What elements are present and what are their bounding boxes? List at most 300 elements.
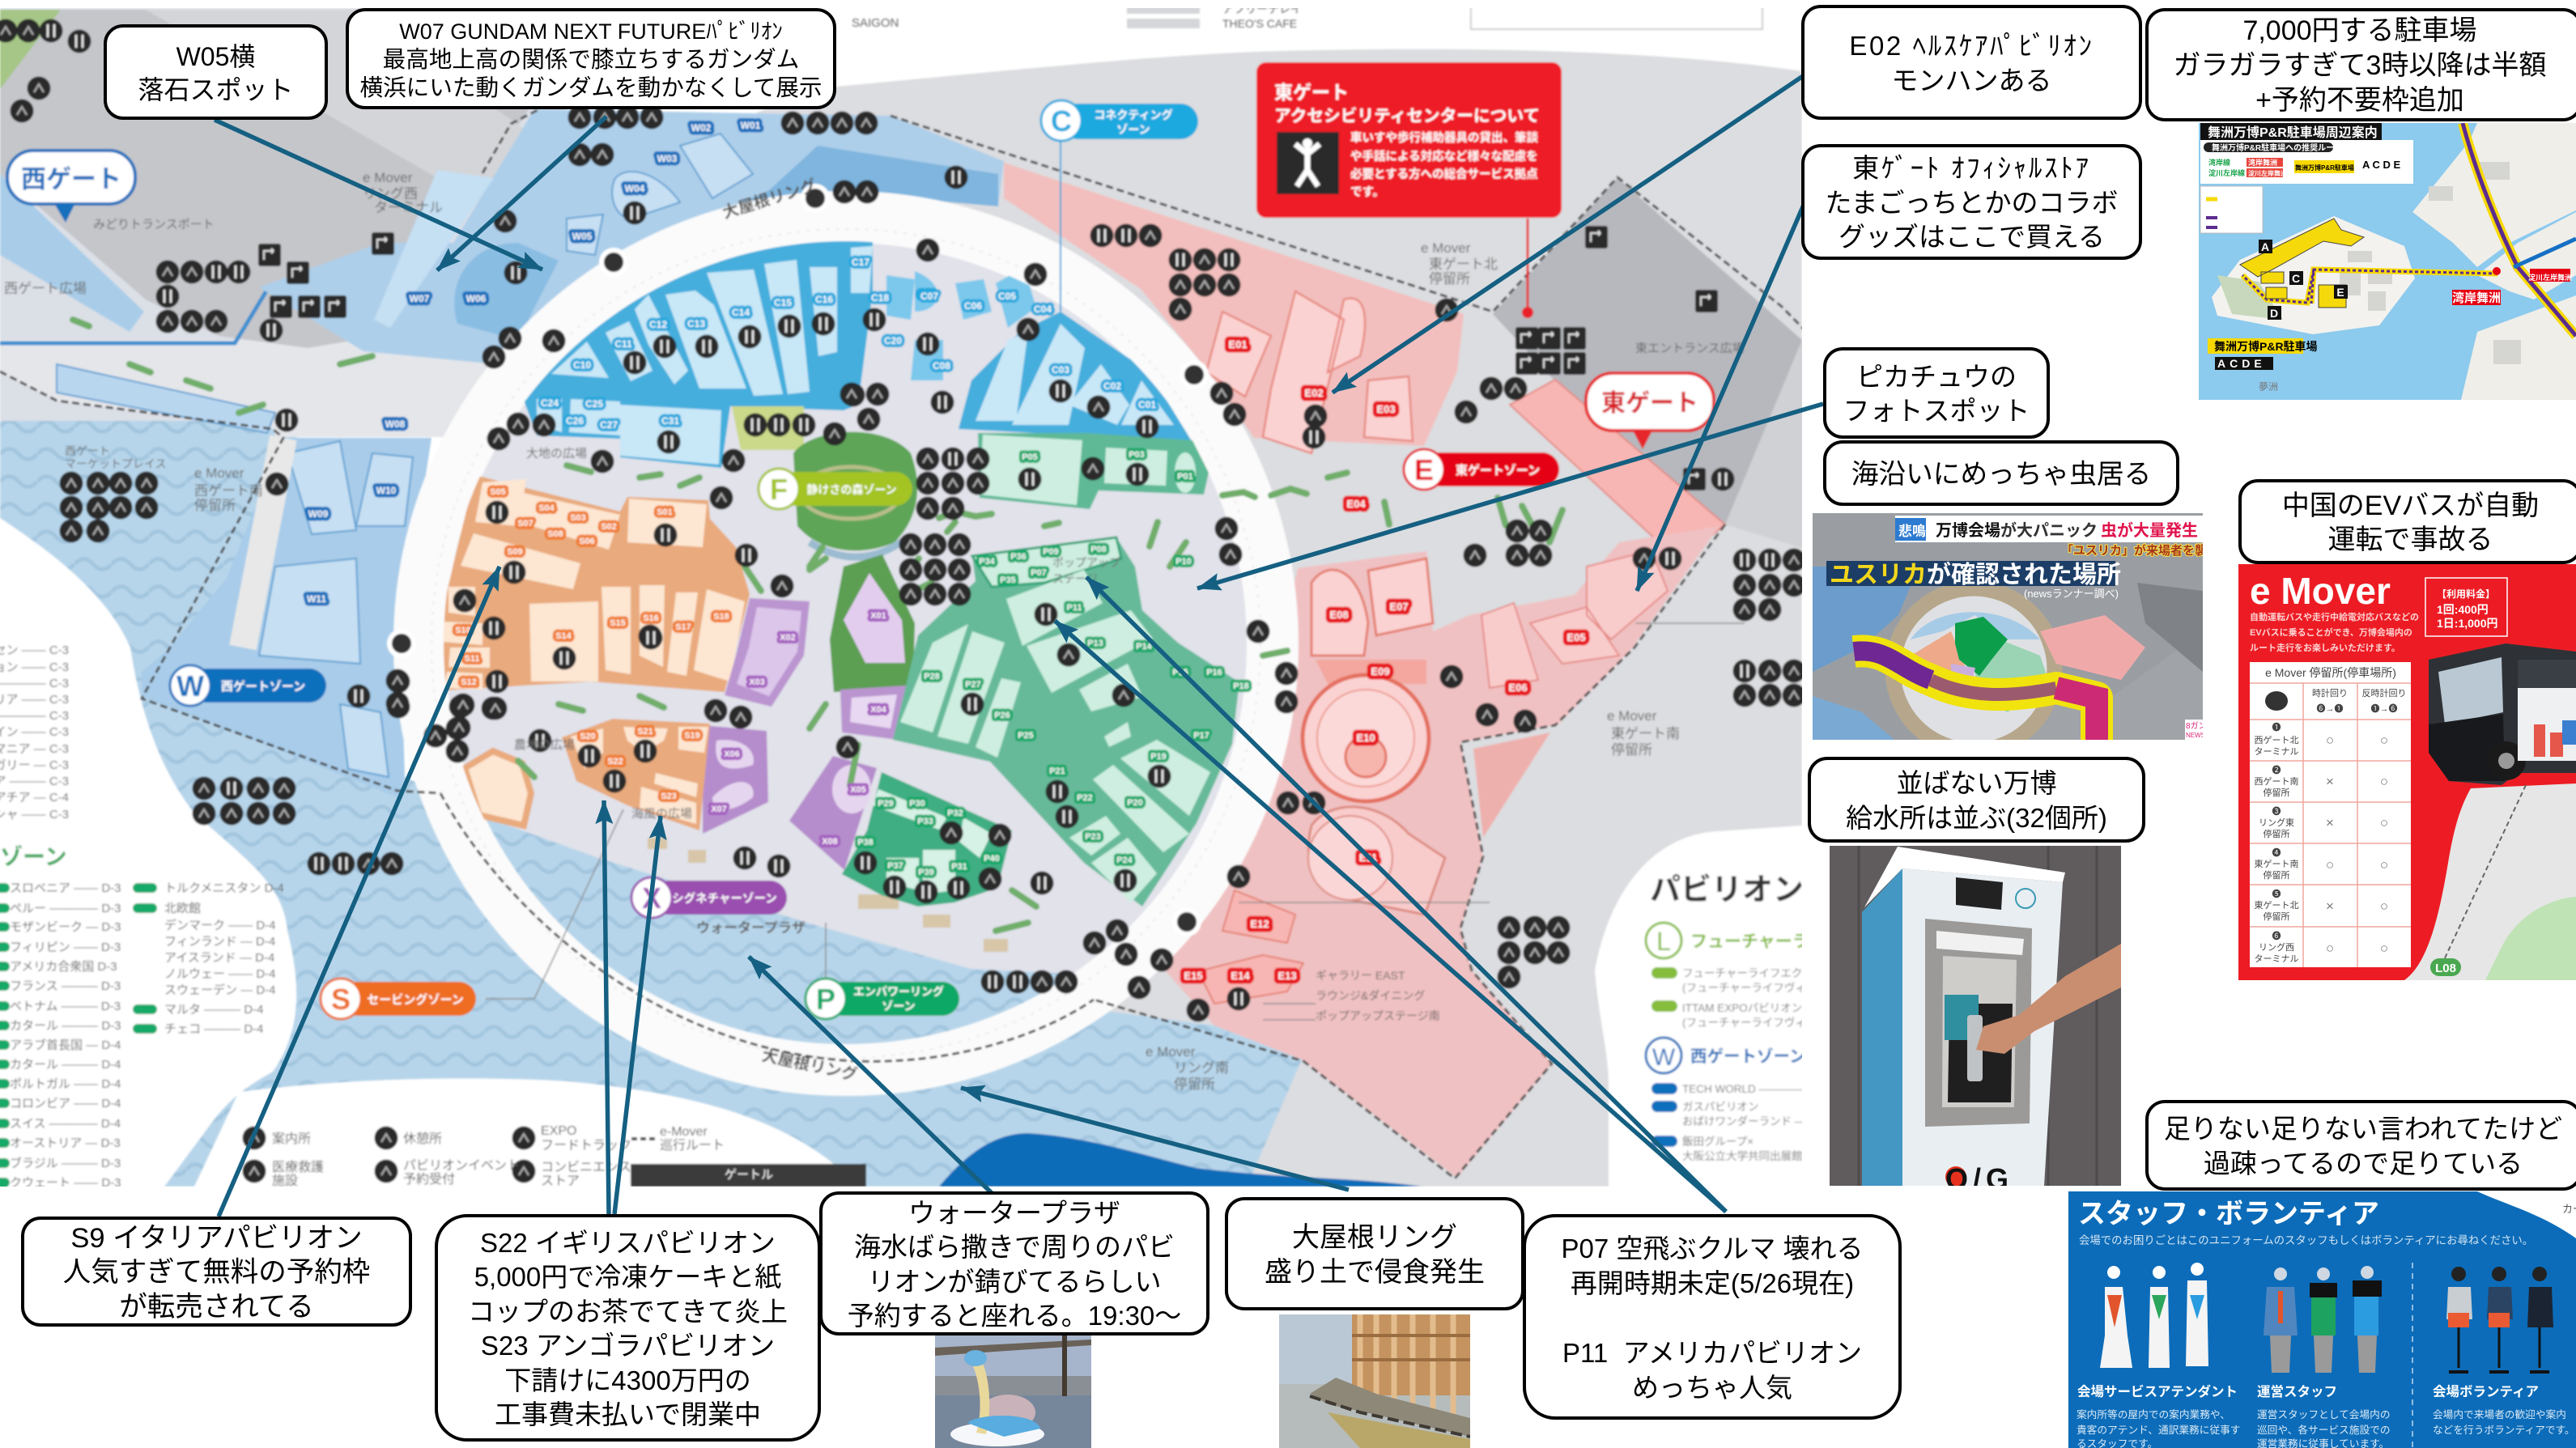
pavilion labels S: S20: [580, 732, 596, 741]
map background: outer ground: [757, 49, 1802, 1187]
image: P&R parking map: 夢洲: [2259, 381, 2278, 393]
pavilion labels C: C26: [566, 415, 584, 427]
dispenser screen: [1956, 877, 2003, 910]
pavilion labels C: C11: [614, 338, 632, 350]
callout: water stations: 並ばない万博: [1896, 768, 2056, 798]
zone W badge: W: [176, 669, 204, 703]
map small place names: 大地の広場: [526, 447, 587, 461]
callout: W05 rockfall: 落石スポット: [138, 74, 293, 104]
callout: S9 Italy: S9 イタリアパビリオン: [70, 1223, 363, 1254]
image: e Mover guide: 1回:400円: [2437, 603, 2489, 616]
zone P main: [893, 537, 1239, 907]
pavilion labels P: P23: [1085, 832, 1101, 842]
arrow: W05 rockfall: [215, 120, 542, 270]
pavilion labels W: W09: [308, 508, 329, 520]
pavilion labels W: W07: [410, 293, 430, 304]
callout: water plaza: ウォータープラザ: [908, 1198, 1120, 1227]
callout: water plaza: [819, 1191, 1209, 1335]
pavilion labels C: C12: [649, 319, 667, 330]
map small place names: アフリーデレイ: [1222, 2, 1302, 15]
pavilion labels X: X03: [749, 677, 765, 687]
zone list legend left: ペルー ———— D-3: [10, 902, 121, 915]
image: P&R parking map: [2199, 123, 2576, 400]
staff panel: role headings: 運営スタッフ: [2257, 1384, 2337, 1399]
west parking area: [0, 10, 529, 348]
parking map: lot letters: A: [2261, 240, 2269, 253]
pavilion labels E: E10: [1356, 732, 1375, 744]
arrow: W07 Gundam: [437, 117, 606, 270]
e Mover: stop table: ×: [2326, 898, 2334, 914]
pavilion labels E: E01: [1228, 338, 1248, 350]
callout: S22 UK and S23 Angola: S23 アンゴラパビリオン: [481, 1331, 775, 1361]
e Mover: stop table: ○: [2380, 774, 2388, 789]
embankment: [1310, 1378, 1470, 1437]
callout: ring erosion: 盛り土で侵食発生: [1265, 1256, 1485, 1287]
pavilion labels P: P25: [1018, 731, 1034, 741]
image: P&R parking map: 舞洲万博P&R駐車場への推奨ルート: [2212, 142, 2342, 153]
pavilion labels P: P09: [1043, 547, 1059, 557]
pavilion labels S: S18: [713, 612, 729, 622]
pavilion labels P: P36: [1010, 552, 1027, 562]
zone list legend left: モザンビーク — D-3: [10, 920, 121, 934]
zone F badge: F: [770, 473, 788, 506]
pavilion list legend right: パビリオン: [1650, 873, 1804, 907]
callout: P07 flying car and P11 USA: めっちゃ人気: [1632, 1373, 1792, 1403]
pavilion labels P: P17: [1193, 731, 1209, 741]
arrow: P07 flying car: [1086, 577, 1726, 1212]
zone list legend left: アメリカ合衆国 D-3: [10, 960, 117, 974]
zone S pavilions: [443, 479, 745, 690]
zone S north: [441, 475, 750, 692]
callout: bugs along the sea: 海沿いにめっちゃ虫居る: [1851, 459, 2151, 490]
pavilion labels E: E02: [1304, 387, 1324, 399]
e Mover: L08 tag: [2430, 958, 2461, 976]
callout: W07 Gundam: 最高地上高の関係で膝立ちするガンダム: [383, 47, 799, 73]
OSG logo: O/G: [1945, 1162, 2009, 1195]
pavilion labels P: P32: [947, 809, 963, 818]
pavilion labels P: P37: [887, 861, 903, 871]
pavilion list legend right: 大阪公立大学共同出展館 —: [1682, 1150, 1817, 1162]
staff panel: role descriptions: 巡回や、各サービス施設での: [2257, 1424, 2391, 1436]
zone list legend left: スウェーデン — D-4: [164, 983, 276, 997]
map small place names: みどりトランスポート: [93, 218, 215, 231]
pavilion labels C: C15: [774, 297, 792, 308]
pavilion labels C: C16: [815, 294, 833, 305]
parking map: bottom tag: [2208, 338, 2303, 354]
zone list legend left: マルタ ——— D-4: [164, 1003, 264, 1017]
pavilion labels S: S10: [455, 626, 471, 635]
zone list legend left: ノルウェー —— D-4: [164, 967, 276, 981]
pavilion labels P: P21: [1049, 766, 1065, 776]
pavilion labels C: C14: [732, 307, 750, 318]
operations staff figures: [2264, 1266, 2382, 1373]
map small place names: 停留所: [194, 498, 236, 513]
forest with lavender: [830, 554, 915, 692]
map small place names: e Mover: [363, 170, 413, 185]
red accessibility leader: [1527, 219, 1528, 318]
inner water: [444, 241, 1248, 1046]
map small place names: リング西: [363, 186, 418, 202]
pavilion list legend right: W: [1652, 1044, 1676, 1071]
zone P badge: ゾーン: [882, 1000, 916, 1013]
map small place names: 農地の広場: [514, 738, 575, 752]
image: midge location news screenshot: NEWS: [2186, 732, 2205, 739]
pavilion labels S: S23: [661, 792, 677, 801]
callout: S9 Italy: 人気すぎて無料の予約枠: [63, 1257, 370, 1288]
zone C badge: コネクティング: [1094, 108, 1173, 121]
pavilion labels C: C02: [1103, 380, 1121, 392]
callout: E02 health pavilion: モンハンある: [1891, 65, 2051, 96]
map small place names: 西ゲート南: [194, 483, 263, 499]
pavilion labels C: C18: [871, 292, 889, 304]
pavilion labels W: W08: [385, 418, 406, 430]
parking map: exit labels: 湾岸舞洲: [2452, 291, 2501, 305]
arrow: ring erosion: [961, 1088, 1349, 1190]
bottle: [1967, 1015, 1983, 1081]
map small place names: 大屋根リング: [760, 1045, 859, 1085]
image: midge location news screenshot: 虫が大量発生: [2101, 520, 2198, 540]
zone P badge: P: [816, 983, 835, 1016]
pavilion list legend right: [1595, 826, 1843, 1187]
pavilion labels C: C08: [933, 360, 950, 372]
pavilion labels E: E05: [1566, 631, 1586, 643]
e Mover: stop table: [2250, 662, 2411, 967]
bottom facility legend: 予約受付: [403, 1172, 455, 1187]
parking map: routes: [2463, 123, 2576, 336]
pavilion labels P: P26: [994, 711, 1010, 720]
e Mover: stop table: ❷: [2272, 765, 2281, 775]
pavilion labels C: C17: [852, 257, 869, 268]
image: midge location news screenshot: 8ガン: [2186, 721, 2207, 731]
e Mover: description: EVバスに乗ることができ、万博会場内の: [2250, 626, 2412, 638]
pavilion list legend right: TECH WORLD ————: [1682, 1083, 1803, 1095]
callout: W07 Gundam: 横浜にいた動くガンダムを動かなくして展示: [359, 74, 823, 100]
news: headline bar: [1895, 516, 2203, 542]
zone list legend left: カタール ——— D-4: [10, 1058, 121, 1072]
pavilion labels E: E09: [1371, 665, 1390, 677]
e Mover: stop table: ❶→❻: [2370, 703, 2398, 714]
zone list legend left: スイス ———— D-4: [10, 1117, 121, 1131]
e Mover: description: 自動運転バスや走行中給電対応バスなどの: [2250, 611, 2419, 622]
e Mover: stop table: ○: [2326, 941, 2334, 956]
arrow: Pikachu photo spot: [1197, 404, 1823, 588]
pavilion labels P: P19: [1150, 752, 1167, 762]
zone list legend left: スロベニア —— D-3: [10, 881, 121, 895]
parking map: lot letters: E: [2336, 286, 2344, 299]
pavilion labels C: C05: [998, 291, 1016, 302]
news: affected coast highlight: [1854, 651, 2097, 740]
ring toilets: [402, 198, 1194, 922]
pavilion labels X: [711, 611, 887, 847]
staff panel: role headings: 会場サービスアテンダント: [2077, 1383, 2238, 1399]
image: midge location news screenshot: ユスリカが確認された場所: [1830, 561, 2121, 588]
zone C: [441, 235, 1239, 907]
callout: E02 health pavilion: [1801, 5, 2142, 120]
staff panel: role descriptions: 案内所等の屋内での案内業務や、: [2077, 1408, 2230, 1420]
zone P lower: [842, 772, 1012, 907]
zone P badge: [806, 979, 959, 1019]
pavilion labels E: E13: [1277, 970, 1297, 982]
callout: parking lot: [2145, 8, 2576, 121]
staff panel: role descriptions: 会場内で来場者の歓迎や案内: [2433, 1409, 2566, 1420]
zone list legend left: ブラジル ——— D-3: [10, 1156, 121, 1170]
staff panel: title: スタッフ・ボランティア: [2078, 1199, 2379, 1229]
e Mover: stop table: 時計回り: [2312, 687, 2348, 699]
general facility icons: [6, 31, 1794, 1171]
parking map: lot letters: C: [2292, 272, 2300, 285]
pavilion labels P: P10: [1175, 557, 1192, 567]
pavilion labels W: W11: [307, 593, 326, 605]
callout: S22 UK and S23 Angola: コップのお茶でてきて炎上: [468, 1297, 788, 1326]
zone list legend left: デンマーク —— D-4: [164, 918, 276, 932]
pavilion labels C: C25: [585, 398, 603, 410]
pavilion labels X: X05: [850, 785, 866, 795]
callout: W05 rockfall: [104, 24, 328, 120]
e Mover: stop table: 東ゲート南: [2254, 859, 2299, 869]
orange hexagon pavilion: [465, 751, 531, 826]
bottom facility legend: ストア: [541, 1174, 580, 1188]
pavilion labels P: P03: [1129, 450, 1145, 460]
zone list legend left: フィンランド — D-4: [164, 935, 275, 949]
pavilion labels P: P18: [1233, 682, 1249, 691]
pavilion labels W: W01: [741, 120, 761, 131]
parking map: route legend: [2200, 140, 2413, 184]
pavilion list legend right: フューチャーライフエクスペ: [1682, 967, 1823, 979]
zone list legend left: 北欧館: [164, 902, 201, 915]
map small place names: 西ゲート広場: [4, 281, 87, 296]
arrow: P11 USA: [1055, 621, 1726, 1212]
pavilion labels S: S22: [607, 757, 623, 766]
east parking diamond: [1493, 178, 1802, 524]
zone X badge: シグネチャーゾーン: [672, 891, 777, 906]
e Mover: stop table: 東ゲート北: [2254, 900, 2299, 911]
e Mover: stop table: ❻: [2272, 931, 2281, 941]
map small place names: SAIGON: [852, 16, 899, 30]
dispenser body: [1862, 868, 1902, 1186]
bottom facility legend: 施設: [272, 1174, 298, 1188]
zone P badge: エンパワーリング: [853, 985, 944, 998]
west gate strip: [0, 174, 144, 332]
pavilion labels C: C19: [918, 289, 936, 300]
e Mover: stop table: ❸: [2272, 806, 2281, 817]
deep blue bay: [939, 1133, 1422, 1187]
zone C badge: [1041, 100, 1198, 141]
map small place names: ウォータープラザ: [696, 920, 806, 936]
shoreline water: [1328, 1412, 1470, 1448]
pavilion labels P: P22: [1077, 793, 1093, 803]
callout: parking lot: ガラガラすぎて3時以降は半額: [2174, 50, 2546, 81]
map small place names: 停留所: [1174, 1076, 1215, 1092]
callout: E02 health pavilion: E02 ﾍﾙｽｹｱﾊﾟﾋﾞﾘｵﾝ: [1849, 31, 2094, 61]
image: midge location news screenshot: [1813, 513, 2219, 750]
arrow: S9 Italy: [219, 567, 499, 1217]
callout: staff sufficient: 過疎ってるので足りている: [2204, 1148, 2523, 1178]
callout: parking lot: 7,000円する駐車場: [2242, 15, 2477, 46]
pavilion labels C: C13: [687, 318, 705, 329]
callout: W07 Gundam: W07 GUNDAM NEXT FUTUREﾊﾟﾋﾞﾘｵﾝ: [399, 19, 783, 44]
e Mover: stop table: ❹: [2272, 847, 2281, 858]
pavilion labels P: P27: [965, 680, 981, 690]
pavilion labels P: P29: [878, 799, 894, 809]
image: P&R parking map: A C D E: [2362, 159, 2401, 171]
image: P&R parking map: 舞洲万博P&R駐車場: [2214, 340, 2318, 353]
map small place names: e Mover: [194, 465, 244, 481]
pavilion labels P: P30: [909, 799, 925, 809]
pavilion labels X: X02: [780, 633, 796, 643]
e Mover: stop table: ○: [2380, 732, 2388, 748]
pavilion labels C: C31: [661, 415, 679, 427]
accessibility center panel: アクセシビリティセンターについて: [1274, 107, 1540, 125]
e Mover: stop table: 西ゲート北: [2254, 735, 2299, 745]
accessibility center panel: 必要とする方への総合サービス拠点: [1350, 167, 1538, 181]
image: e Mover guide: [2238, 564, 2576, 980]
coastal sand blocks: [648, 838, 1008, 952]
callout: east gate store: グッズはここで買える: [1838, 222, 2105, 252]
staff panel: role descriptions: などを行うボランティアです。: [2433, 1425, 2575, 1436]
pavilion labels P: P16: [1206, 668, 1222, 677]
pavilion labels S: [455, 487, 729, 801]
pavilion labels W: W10: [376, 485, 397, 496]
callout: east gate store: 東ｹﾞｰﾄ ｵﾌｨｼｬﾙｽﾄｱ: [1852, 153, 2091, 183]
zone P upper: [978, 433, 1209, 509]
zone F forest: [732, 406, 804, 450]
pavilion labels S: S09: [507, 547, 523, 557]
e Mover: title: e Mover: [2250, 570, 2391, 612]
map small place names: THEO'S CAFE: [1222, 17, 1297, 30]
pavilion list legend right: 飯田グループ×: [1682, 1136, 1753, 1148]
pavilion labels W: W02: [691, 122, 712, 134]
pavilion labels P: P15: [1172, 668, 1188, 677]
arrow: S23 Angola: [614, 816, 661, 1214]
divider: [2412, 1263, 2413, 1448]
e Mover: stop table: ❺: [2272, 889, 2281, 899]
pavilion labels P: P01: [1177, 472, 1193, 482]
e Mover: stop table: ○: [2326, 857, 2334, 873]
parking map: parking lots: [2240, 219, 2364, 308]
news: logo: [2185, 720, 2203, 740]
image: e Mover guide: 【利用料金】: [2437, 588, 2495, 600]
e Mover: stop table: ターミナル: [2254, 953, 2299, 964]
map small place names: 停留所: [1611, 742, 1652, 758]
callout: P07 flying car and P11 USA: P07 空飛ぶクルマ 壊れる: [1561, 1234, 1864, 1263]
bottom facility legend: 医療救護: [272, 1160, 324, 1174]
pavilion labels P: P31: [951, 862, 967, 872]
pavilion labels C: C20: [884, 335, 902, 346]
parking map: symbol legend: [2200, 186, 2263, 233]
pavilion list legend right: ガスパビリオン: [1682, 1101, 1758, 1113]
zone E south pavilions: [1311, 558, 1433, 656]
zone list legend left: フランス ——— D-3: [10, 979, 121, 993]
pavilion labels S: S19: [684, 731, 700, 741]
e Mover: stop table: ❶: [2272, 722, 2281, 732]
arrow: water plaza: [749, 957, 992, 1193]
pavilion labels W: [307, 120, 761, 605]
e Mover: map corner: [2404, 783, 2576, 980]
image: midge location news screenshot: 悲鳴: [1898, 524, 1926, 539]
staff panel: role descriptions: 貴客のアテンド、通訳業務に従事す: [2077, 1424, 2241, 1436]
staff panel: role descriptions: 運営スタッフとして会場内の: [2257, 1409, 2391, 1420]
zone S badge: セービングゾーン: [367, 992, 464, 1007]
image: P&R parking map: 淀川左岸舞洲: [2248, 169, 2287, 177]
west gate bubble: 西ゲート: [21, 165, 121, 193]
pavilion labels P: P05: [1022, 452, 1038, 462]
east gate bubble: [1586, 373, 1714, 449]
pavilion labels X: X04: [870, 705, 887, 715]
callout: S9 Italy: [21, 1217, 412, 1327]
map small place names: 東エントランス広場: [1635, 342, 1745, 355]
zone E north: [1004, 163, 1464, 446]
zone W badge: 西ゲートゾーン: [221, 679, 305, 694]
pavilion labels P: P34: [979, 557, 996, 567]
image: e Mover guide: 1日:1,000円: [2437, 617, 2497, 630]
pavilion labels E: E11: [1359, 851, 1377, 864]
map small place names: 西ゲート: [65, 444, 110, 457]
pavilion labels E: E12: [1250, 918, 1269, 930]
e Mover: stop table: ×: [2326, 815, 2334, 830]
callout: ring erosion: 大屋根リング: [1292, 1222, 1457, 1253]
zone S badge: S: [331, 983, 351, 1016]
pavilion labels C: [541, 257, 1156, 431]
e Mover: description: [2250, 611, 2419, 653]
image: P&R parking map: 舞洲万博P&R駐車場周辺案内: [2208, 125, 2378, 140]
zone X lower: [703, 725, 768, 834]
e Mover: fare box: [2425, 578, 2507, 636]
pavilion labels P: P24: [1116, 856, 1133, 865]
dispenser panel: [1925, 919, 2032, 1127]
image: Lapras statue at Water Plaza: [935, 1335, 1091, 1448]
pavilion labels C: C06: [964, 300, 982, 312]
arrow: S22 UK: [604, 800, 609, 1214]
bottom facility legend: 案内所: [272, 1132, 311, 1146]
pavilion labels S: S04: [538, 503, 555, 513]
map small place names: e Mover: [1421, 240, 1471, 256]
pavilion labels S: S02: [601, 522, 617, 532]
staff panel: role headings: 会場ボランティア: [2433, 1384, 2539, 1399]
park paths and trees: [73, 320, 1562, 931]
e Mover: stop table: 反時計回り: [2362, 687, 2406, 699]
map small place names: 東ゲート南: [1611, 726, 1680, 741]
pavilion list legend right: L: [1656, 927, 1671, 956]
pavilion labels E: [1184, 338, 1586, 982]
zone X badge: [631, 877, 787, 918]
callout: W05 rockfall: W05横: [176, 42, 255, 71]
pavilion labels P: P35: [1000, 575, 1016, 585]
zone W north: [259, 109, 1004, 363]
pavilion labels E: E03: [1376, 403, 1396, 415]
pavilion labels S: S07: [517, 519, 533, 529]
pavilion labels W: W03: [657, 153, 678, 164]
pavilion labels P: P28: [924, 672, 940, 682]
zone list legend left: トルクメニスタン D-4: [164, 881, 284, 895]
pavilion labels E: E06: [1508, 682, 1528, 694]
zone C badge: ゾーン: [1116, 123, 1150, 136]
parking map: exit labels: [2452, 269, 2572, 305]
news: location title: [1826, 561, 2115, 586]
callout: EV bus accident: 中国のEVバスが自動: [2282, 490, 2539, 521]
pavilion labels P: P07: [1031, 568, 1047, 578]
zone X north: [725, 598, 810, 707]
map small place names: ポップアップ: [1052, 556, 1120, 569]
callout: P07 flying car and P11 USA: 再開時期未定(5/26現在): [1571, 1268, 1854, 1298]
pavilion labels E: E14: [1231, 970, 1250, 982]
pavilion labels S: S16: [643, 614, 659, 623]
map small place names: [4, 2, 1745, 1092]
pavilion labels P: P39: [918, 868, 934, 877]
zone list legend left: ベトナム ——— D-3: [10, 1000, 121, 1013]
callout: P07 flying car and P11 USA: [1523, 1214, 1902, 1420]
arrow: E02 health pavilion: [1333, 73, 1808, 393]
map small place names: 停留所: [1429, 271, 1470, 287]
